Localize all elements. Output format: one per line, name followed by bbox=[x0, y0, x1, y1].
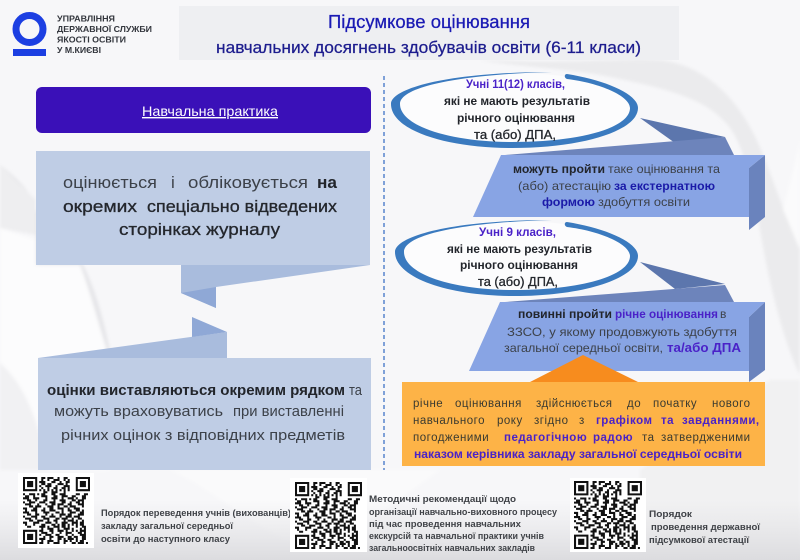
panel: assessed on separate pages: спеціально відведених bbox=[147, 197, 338, 216]
panel: grades in separate column: при виставленні bbox=[233, 403, 344, 420]
QR block: transfer procedure: Порядок переведення учнів (вихованців) bbox=[101, 508, 291, 519]
organisation name: ЯКОСТІ ОСВІТИ bbox=[57, 34, 126, 44]
heading: practice: Навчальна практика bbox=[142, 103, 278, 119]
QR block: methodical recommendations bbox=[290, 478, 558, 554]
icon: logo ring bbox=[16, 16, 43, 42]
panel: annual assessment note: наказом керівника закладу загальної середньої освіти bbox=[414, 449, 742, 461]
arrow ribbon: may pass externally: здобуття освіти bbox=[598, 195, 690, 209]
QR block: transfer procedure: освіти до наступного класу bbox=[101, 534, 231, 545]
QR block: methodical recommendations: організації навчально-виховного процесу bbox=[369, 507, 558, 518]
panel: annual assessment note: завданнями, bbox=[682, 415, 760, 427]
QR block: methodical recommendations: загальноосвітніх навчальних закладів bbox=[369, 543, 535, 554]
panel: annual assessment note: оцінювання bbox=[455, 398, 522, 410]
QR block: transfer procedure: закладу загальної середньої bbox=[101, 521, 233, 532]
panel: annual assessment note: нового bbox=[712, 398, 750, 410]
arrow ribbon: may pass externally: (або) атестацію bbox=[518, 179, 611, 193]
arrow ribbon: may pass externally: можуть пройти bbox=[513, 162, 605, 176]
panel: annual assessment note: річне bbox=[413, 398, 443, 410]
panel: assessed on separate pages bbox=[36, 151, 370, 308]
panel: annual assessment note: до bbox=[627, 398, 641, 410]
panel: annual assessment note: згідно bbox=[534, 415, 568, 427]
panel: annual assessment note bbox=[402, 355, 765, 466]
arrow ribbon: may pass externally bbox=[473, 118, 765, 230]
callout: students of grade 9: та (або) ДПА, bbox=[478, 275, 558, 289]
arrow ribbon: must pass annual assessment: повинні пройти bbox=[518, 307, 612, 321]
QR block: state attestation procedure: підсумкової атестації bbox=[649, 535, 749, 546]
arrow ribbon: must pass annual assessment: та/або ДПА bbox=[667, 340, 742, 355]
arrow ribbon: must pass annual assessment: річне оцінювання bbox=[615, 307, 718, 321]
heading: practice bbox=[36, 87, 371, 133]
panel: annual assessment note: здійснюється bbox=[536, 398, 613, 410]
callout: students of grades 11(12): Учні 11(12) класів, bbox=[466, 77, 565, 91]
QR block: state attestation procedure: Порядок bbox=[649, 509, 692, 520]
arrow ribbon: must pass annual assessment: в bbox=[720, 307, 726, 321]
panel: grades in separate column: річних оцінок з відповідних предметів bbox=[61, 427, 345, 444]
arrow ribbon: must pass annual assessment: ЗЗСО, у якому продовжують здобуття bbox=[507, 325, 737, 339]
panel: grades in separate column bbox=[38, 317, 371, 470]
panel: annual assessment note: та bbox=[642, 432, 655, 444]
callout: students of grades 11(12): та (або) ДПА, bbox=[474, 128, 556, 142]
QR block: state attestation procedure: проведення державної bbox=[651, 522, 760, 533]
callout: students of grade 9: Учні 9 класів, bbox=[479, 225, 556, 239]
title bbox=[179, 6, 679, 60]
arrow ribbon: may pass externally: формою bbox=[542, 195, 595, 209]
panel: annual assessment note: графіком bbox=[596, 415, 652, 427]
callout: students of grade 9: річного оцінювання bbox=[460, 258, 578, 272]
organisation name: У М.КИЄВІ bbox=[57, 45, 101, 55]
panel: annual assessment note: початку bbox=[653, 398, 697, 410]
panel: grades in separate column: оцінки виставляються окремим рядком bbox=[47, 382, 345, 399]
logo bbox=[13, 14, 152, 56]
panel: annual assessment note: та bbox=[661, 415, 674, 427]
QR block: methodical recommendations: екскурсій та навчальної практики учнів bbox=[369, 531, 544, 542]
panel: assessed on separate pages: на bbox=[317, 173, 338, 192]
panel: annual assessment note: з bbox=[579, 415, 585, 427]
callout: students of grades 11(12): річного оцінювання bbox=[457, 111, 575, 125]
panel: assessed on separate pages: обліковується bbox=[188, 173, 308, 192]
organisation name bbox=[57, 14, 152, 55]
title: навчальних досягнень здобувачів освіти (6-11 класи) bbox=[216, 38, 641, 57]
panel: grades in separate column: та bbox=[349, 382, 363, 399]
arrow ribbon: may pass externally: таке оцінювання та bbox=[608, 162, 720, 176]
title: Підсумкове оцінювання bbox=[328, 12, 530, 32]
panel: grades in separate column: можуть враховуватись bbox=[54, 403, 223, 420]
panel: assessed on separate pages: оцінюється bbox=[63, 173, 157, 192]
QR block: transfer procedure bbox=[18, 473, 291, 548]
panel: annual assessment note: радою bbox=[593, 432, 633, 444]
QR block: methodical recommendations: під час проведення навчальних bbox=[369, 519, 522, 530]
panel: assessed on separate pages: і bbox=[171, 173, 175, 192]
organisation name: УПРАВЛІННЯ bbox=[57, 14, 115, 24]
panel: assessed on separate pages: сторінках журналу bbox=[119, 220, 281, 239]
callout: students of grades 11(12) bbox=[391, 72, 638, 148]
panel: assessed on separate pages: окремих bbox=[63, 197, 138, 216]
panel: annual assessment note: погодженими bbox=[413, 432, 489, 444]
callout: students of grades 11(12): які не мають результатів bbox=[444, 94, 590, 108]
arrow ribbon: must pass annual assessment bbox=[469, 262, 765, 382]
organisation name: ДЕРЖАВНОЇ СЛУЖБИ bbox=[57, 24, 152, 34]
arrow ribbon: must pass annual assessment: загальної середньої освіти, bbox=[504, 341, 663, 355]
callout: students of grade 9: які не мають результатів bbox=[447, 242, 592, 256]
panel: annual assessment note: навчального bbox=[413, 415, 485, 427]
panel: annual assessment note: року bbox=[497, 415, 523, 427]
QR block: state attestation procedure bbox=[570, 478, 760, 552]
panel: annual assessment note: затвердженими bbox=[661, 432, 751, 444]
callout: students of grade 9 bbox=[395, 220, 638, 296]
panel: annual assessment note: педагогічною bbox=[504, 432, 587, 444]
QR block: methodical recommendations: Методичні рекомендації щодо bbox=[369, 494, 516, 505]
arrow ribbon: may pass externally: за екстернатною bbox=[614, 179, 715, 193]
